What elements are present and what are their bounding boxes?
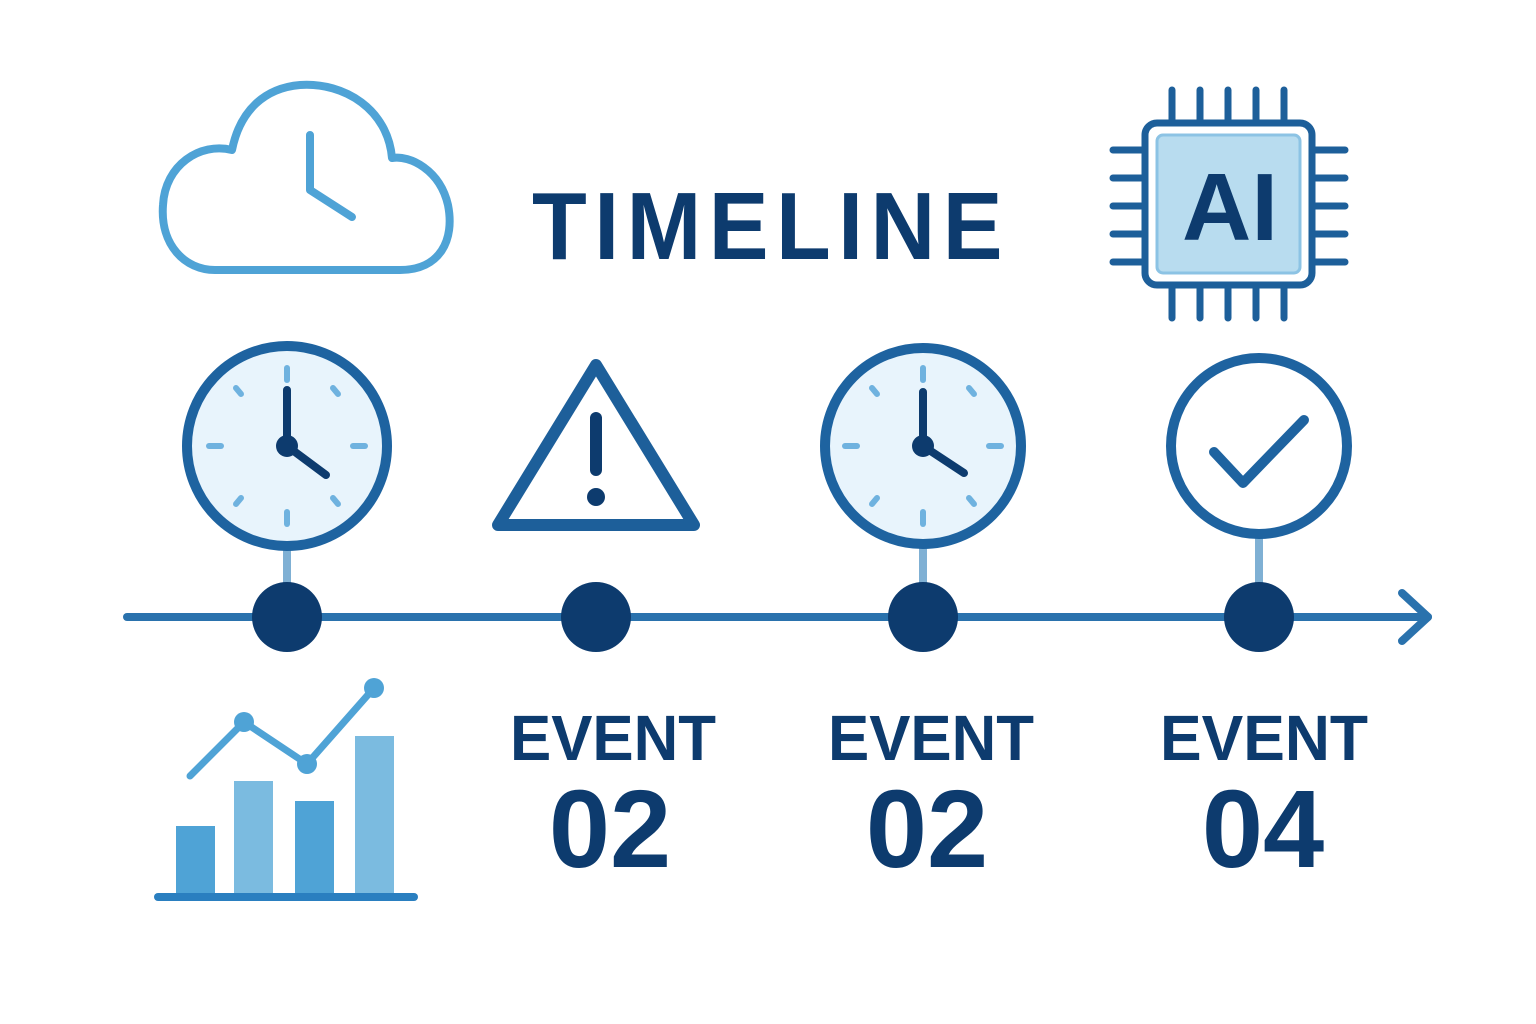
icon: check circle: [1171, 358, 1347, 534]
icon: cloud with clock: [163, 85, 450, 270]
icon: bar chart: [158, 678, 414, 897]
event label 3: EVENT: [1160, 702, 1368, 774]
event label 2: EVENT: [828, 702, 1034, 774]
timeline dots: [252, 582, 1294, 652]
icon: clock 1: [187, 346, 387, 546]
timeline axis with arrow: [127, 593, 1428, 641]
event label 1: 02: [549, 768, 671, 891]
event label 1: [510, 702, 716, 891]
icon: warning triangle: [498, 365, 694, 525]
event label 3: 04: [1202, 768, 1324, 891]
icon: clock 2: [825, 348, 1021, 544]
event label 2: [828, 702, 1034, 891]
connectors: [287, 535, 1259, 584]
event label 2: 02: [866, 768, 988, 891]
event label 3: [1160, 702, 1368, 891]
icon: AI chip: AI: [1182, 154, 1278, 261]
event label 1: EVENT: [510, 702, 716, 774]
icon: AI chip: [1113, 90, 1345, 318]
title: TIMELINE: [532, 173, 1010, 280]
